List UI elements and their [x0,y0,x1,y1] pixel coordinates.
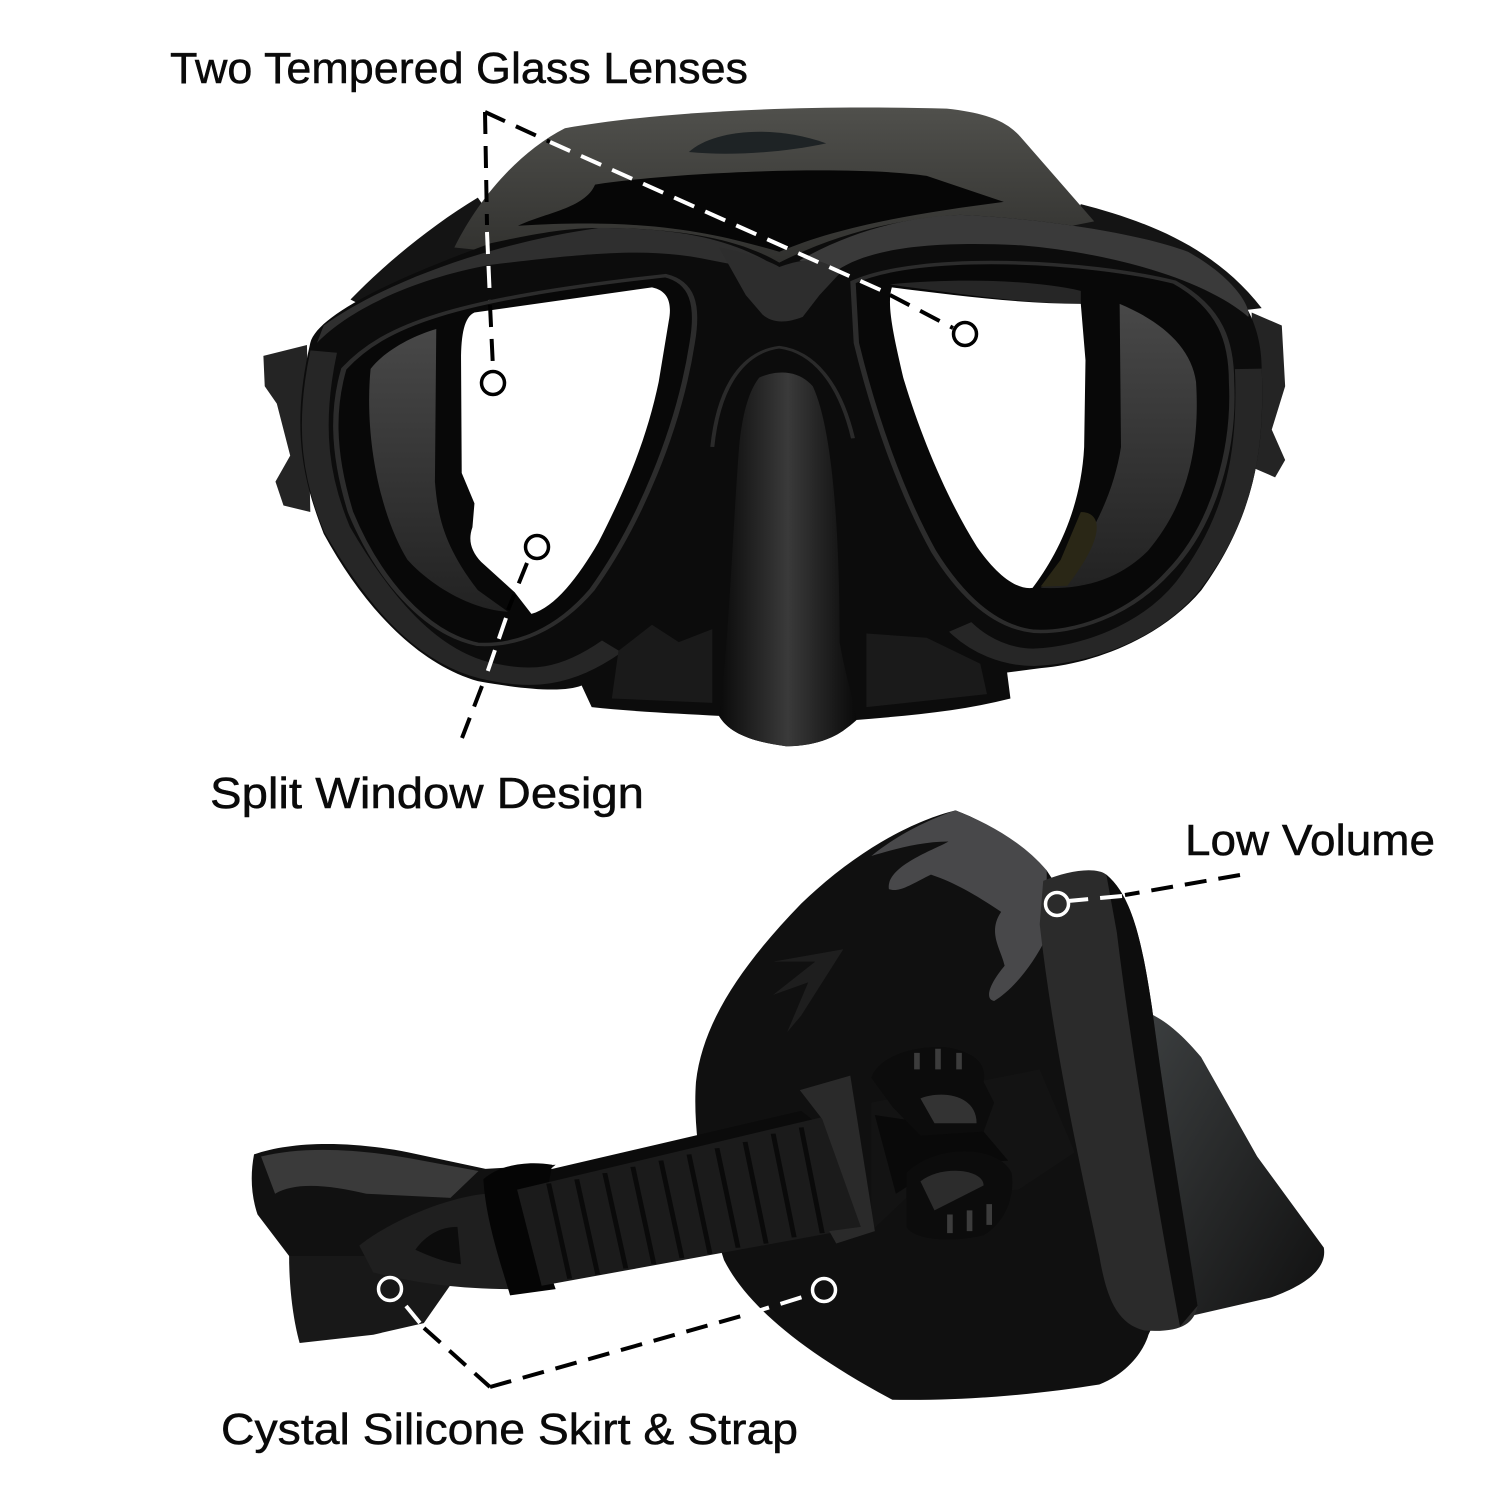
buckle bracket [871,1069,1075,1231]
adjustable strap [517,1117,864,1286]
callout line: low volume [1068,875,1240,901]
buckle lower grip [906,1151,1012,1240]
strap back loop [252,1144,556,1268]
callout lines: two tempered glass lenses [485,112,953,368]
skirt logo [773,949,843,1032]
right lens reflection [1041,304,1197,588]
lens frame [1040,870,1198,1331]
right lens clear glass [890,287,1085,588]
bracket vertical bar [800,1076,875,1244]
frame rim [1106,875,1198,1326]
silicone skirt top [454,108,1094,282]
lower skirt ribs [612,625,987,707]
frame top band right [799,215,1249,317]
marker: left lens [482,372,504,394]
marker: split window [526,536,548,558]
right buckle [1252,313,1285,477]
dark skirt recess [518,170,1004,252]
strap behind frame [350,198,1262,317]
nose arch [712,347,853,447]
left lens clear glass [461,287,670,614]
strap lower loop [289,1256,450,1343]
main frame silhouette [300,215,1262,746]
skirt body [695,810,1166,1400]
marker: right lens [954,322,976,346]
nose bridge [719,247,840,321]
buckle upper grip [871,1047,994,1136]
strap back edge [535,1111,822,1194]
marker: low volume [1046,892,1068,916]
right lens ring [853,263,1232,631]
outer frame band right [960,369,1249,657]
right lens dark tint [1041,512,1097,587]
skirt reflection [689,132,826,154]
marker: strap [378,1278,402,1300]
skirt highlight [871,810,1047,1001]
label: split window design: Split Window Design [210,769,644,818]
left lens reflection [369,329,508,612]
label: cystal silicone skirt and strap: Cystal Silicone Skirt & Strap [221,1405,798,1454]
callout line: split window design [462,563,527,738]
right lens top shade [890,281,1081,304]
strap clip triangle [359,1194,514,1289]
clip inner mark [415,1227,461,1264]
label: low volume: Low Volume [1185,816,1435,865]
strap keeper [483,1163,556,1295]
side view of mask [252,810,1324,1400]
right skirt [1145,1011,1324,1316]
left buckle [263,345,310,512]
buckle centre [875,1115,1008,1194]
left lens ring [336,276,695,644]
strap inner highlight [261,1150,479,1198]
nose pocket [719,372,856,746]
title: two tempered glass lenses: Two Tempered Glass Lenses [170,44,748,93]
front view of mask [263,108,1285,746]
outer frame band left [315,352,612,676]
callout lines: crystal silicone skirt and strap [406,1294,812,1387]
marker: skirt [812,1278,836,1302]
frame top band left [317,228,779,343]
